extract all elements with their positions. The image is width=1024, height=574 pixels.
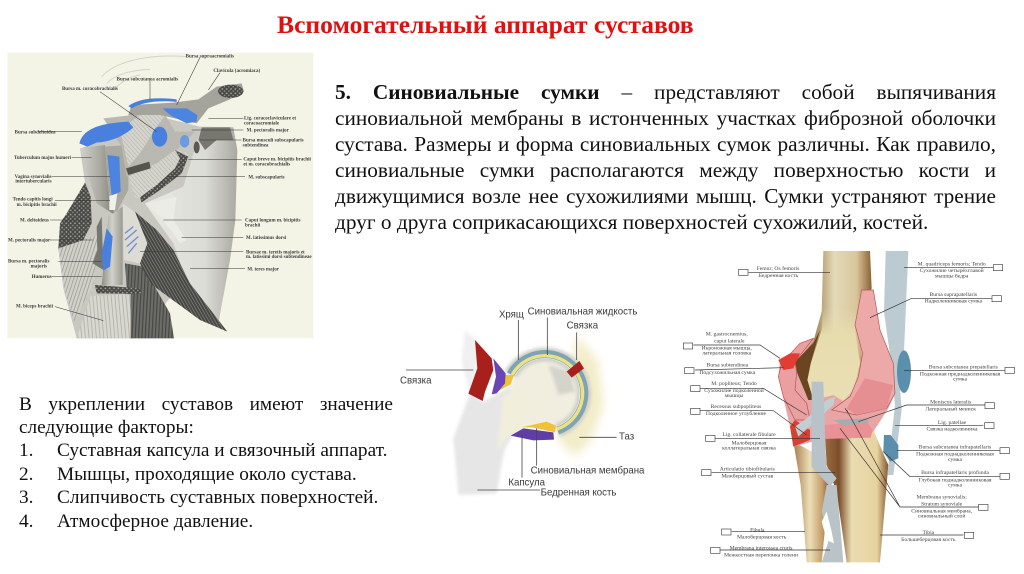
text block: synovial bursae description: синовиальной мембраны в истонченных участках фиброзной оболочки: [335, 106, 996, 130]
shoulder anatomical labels: coracoacromiale: [244, 122, 280, 127]
knee anatomical labels: Икроножная мышца,: [701, 345, 752, 351]
knee anatomical labels: Membrana synovialis;: [916, 494, 967, 500]
text block: joint strengthening factors: следующие факторы:: [19, 417, 194, 438]
hip labels: Связка: [400, 376, 432, 387]
hip labels: Связка: [567, 320, 599, 331]
shoulder anatomical labels: subtendinea: [243, 143, 269, 148]
text block: joint strengthening factors: Суставная капсула и связочный аппарат.: [57, 440, 387, 461]
blue fibres: [125, 227, 138, 253]
hip labels: Хрящ: [499, 309, 524, 320]
shoulder anatomical labels: m. latissimi dorsi subtendineae: [246, 255, 312, 260]
collateral ligament: [812, 382, 837, 487]
knee anatomical labels: сумка: [953, 376, 967, 382]
knee anatomical labels: Recessus subpopliteus: [711, 404, 761, 410]
panel: hip joint diagram: [400, 307, 645, 499]
knee anatomical labels: Tibia: [922, 530, 935, 536]
humerus cut: [95, 285, 142, 294]
knee anatomical labels: коллатеральная связка: [722, 445, 776, 451]
knee anatomical labels: Синовиальная мембрана,: [911, 507, 973, 514]
intertubercular sheath: [107, 155, 121, 196]
infrapatellar blue bursa: [883, 435, 898, 462]
leader lines: [693, 268, 1005, 550]
text block: joint strengthening factors: 4.: [19, 510, 33, 532]
deltoid cut: [58, 183, 92, 248]
knee anatomical labels: Bursa subcutanea prepatellaris: [929, 364, 998, 370]
left ligament red: [468, 340, 493, 401]
femur: [797, 251, 872, 402]
synovial inner line: [514, 358, 580, 427]
faint sketch lines at top: [102, 56, 187, 90]
humeral head: [80, 145, 115, 215]
femur bone: [453, 385, 523, 495]
tibia: [825, 430, 888, 562]
bursa inner dark: [847, 378, 893, 415]
bicipital groove band: [105, 145, 128, 215]
lower labrum yellow: [523, 422, 556, 432]
knee anatomical labels: Membrana interossea cruris: [730, 546, 792, 552]
knee anatomical labels: мышцы бедра: [935, 272, 969, 279]
knee anatomical labels: Сухожилие подколенной: [704, 387, 764, 394]
knee anatomical labels: Stratum synoviale: [921, 502, 963, 508]
lower dark muscles: [125, 263, 174, 338]
outer arc shadow: [511, 354, 584, 430]
shoulder anatomical labels: Caput breve m. bicipitis brachii: [243, 158, 312, 163]
shoulder anatomical labels: brachii: [245, 223, 261, 228]
shaft: [102, 207, 123, 285]
shoulder base silhouette: [58, 110, 235, 338]
shoulder anatomical labels: Clavicula (acromiaca): [213, 69, 261, 74]
shoulder anatomical labels: et m. coracobrachialis: [243, 163, 290, 168]
text block: synovial bursae description: [335, 80, 996, 234]
knee anatomical labels: Подколенное углубление: [706, 410, 767, 417]
knee anatomical labels: M. popliteus; Tendo: [711, 381, 757, 387]
oblique tendon: [795, 397, 835, 437]
gastrocnemius red: [778, 353, 800, 370]
shoulder anatomical labels: Bursae m. teretis majoris et: [246, 250, 305, 255]
text block: synovial bursae description: движущимися возле нее сухожилиями мышц. Сумки устраняют трение: [335, 184, 996, 208]
shoulder anatomical labels: Bursa subcutanea acromialis: [117, 78, 178, 83]
femoral head: [510, 358, 580, 428]
knee anatomical labels: Латеральный мениск: [925, 405, 976, 412]
suprapatellar bursa: [832, 290, 895, 415]
knee anatomical labels: Бедренная кость: [759, 273, 798, 279]
hip labels: Синовиальная жидкость: [528, 307, 637, 318]
knee anatomical labels: Большеберцовая кость: [901, 536, 956, 543]
shoulder anatomical labels: Bursa m. coracobrachialis: [62, 87, 118, 92]
light patch: [123, 203, 148, 263]
scapula: [145, 127, 237, 323]
clavicle cut: [218, 85, 243, 98]
fibula: [793, 442, 830, 562]
head inner shading: [548, 365, 575, 395]
knee anatomical labels: Meniscus lateralis: [930, 399, 971, 405]
interosseous membrane: [822, 485, 843, 562]
shoulder anatomical labels: intertubercularis: [15, 180, 52, 185]
knee anatomical labels: Подкожная поднадколенниковая: [916, 452, 994, 458]
right ligament red: [567, 361, 584, 378]
posterior pink synovial: [778, 338, 813, 420]
text block: synovial bursae description: синовиальные сумки располагаются между поверхностью кости и: [335, 158, 996, 182]
neck cream: [497, 392, 530, 452]
femoral condyle cream: [807, 308, 860, 400]
bursa subdeltoidea: [79, 122, 133, 147]
brown shade: [795, 330, 820, 400]
knee anatomical labels: caput laterale: [714, 338, 745, 344]
shoulder anatomical labels: Bursa musculi subscapularis: [243, 139, 304, 144]
text block: synovial bursae description: сустава. Размеры и форма синовиальных сумок различны. Как правило,: [335, 132, 996, 156]
text block: joint strengthening factors: Мышцы, проходящие около сустава.: [57, 464, 357, 485]
shoulder anatomical labels: Bursa supraacromialis: [186, 54, 234, 59]
shoulder anatomical labels: Vagina synovialis: [15, 175, 52, 180]
shoulder anatomical labels: [8, 54, 312, 310]
shoulder anatomical labels: Humerus: [32, 275, 52, 280]
knee anatomical labels: Межберцовый сустав: [721, 473, 774, 480]
capsule blue band: [511, 354, 584, 430]
subscapularis fan: [128, 150, 188, 202]
title: Вспомогательный аппарат суставов: [277, 10, 694, 39]
bursa pectoralis: [102, 228, 113, 271]
knee anatomical labels: Глубокая поднадколенниковая: [919, 476, 992, 483]
subscapularis cut: [140, 150, 188, 202]
hip labels: Капсула: [508, 478, 546, 489]
panel: knee joint anatomy illustration: [683, 251, 1014, 562]
shoulder anatomical labels: M. biceps brachii: [16, 305, 54, 310]
knee anatomical labels: Малоберцовая: [732, 439, 767, 446]
text block: joint strengthening factors: [19, 394, 393, 532]
knee anatomical labels: M. quadriceps femoris; Tendo: [918, 260, 986, 267]
tendon white tip: [109, 193, 117, 210]
coracoid cut: [126, 162, 151, 175]
text block: synovial bursae description: 5. Синовиальные сумки – представляют собой выпячивания: [335, 80, 996, 104]
shoulder anatomical labels: Bursa subdeltoidea: [15, 131, 56, 136]
text block: joint strengthening factors: Атмосферное давление.: [57, 510, 253, 532]
prepatellar blue bursa: [897, 350, 911, 393]
lower red: [790, 420, 810, 447]
shoulder anatomical labels: Tuberculum majus humeri: [14, 156, 72, 161]
synovial fluid yellow band: [512, 356, 583, 429]
knee anatomical labels: Надколенниковая сумка: [925, 299, 983, 305]
knee anatomical labels: Bursa suprapatellaris: [930, 292, 977, 298]
knee anatomical labels: сумка: [948, 457, 962, 463]
lower capsule purple: [511, 428, 554, 440]
number boxes: [683, 265, 1014, 553]
hip labels: Синовиальная мембрана: [531, 466, 645, 477]
shoulder anatomical labels: M. teres major: [247, 267, 280, 272]
bursa subscapularis: [180, 135, 189, 148]
knee anatomical labels: Bursa subtendinea: [707, 363, 749, 369]
shoulder anatomical labels: Bursa m. pectoralis: [8, 259, 49, 264]
upper joint mass: [103, 112, 195, 177]
knee anatomical labels: Подкожная преднадколенниковая: [920, 371, 1001, 377]
knee anatomical labels: Связка надколенника: [926, 427, 978, 433]
label leaders: [38, 57, 245, 321]
shoulder anatomical labels: m. bicipitis brachii: [17, 203, 57, 208]
pelvis cream glow: [557, 335, 603, 457]
bursa supraacromialis: [163, 108, 197, 123]
shoulder anatomical labels: M. latissimus dorsi: [246, 236, 287, 241]
biceps: [77, 294, 131, 338]
panel: shoulder joint anatomy illustration: [7, 53, 313, 338]
white window: [822, 512, 834, 543]
text block: joint strengthening factors: 2.: [19, 464, 33, 485]
knee anatomical labels: Lig. patellae: [938, 420, 967, 426]
teres major: [135, 212, 227, 332]
text block: joint strengthening factors: Слипчивость суставных поверхностей.: [57, 487, 378, 508]
knee base silhouette: [778, 325, 895, 447]
knee anatomical labels: Малоберцовая кость: [737, 534, 787, 541]
scapula fold: [147, 197, 187, 243]
shoulder anatomical labels: M. pectoralis major: [8, 239, 51, 244]
text block: joint strengthening factors: В укреплении суставов имеют значение: [19, 394, 393, 414]
knee anatomical labels: мышцы: [725, 393, 743, 399]
shoulder anatomical labels: Tendo capitis longi: [13, 198, 53, 203]
knee anatomical labels: [699, 260, 1001, 559]
knee anatomical labels: синовиальный слой: [918, 512, 965, 519]
text block: synovial bursae description: друг о друга соприкасающихся поверхностей сухожилий, костей.: [335, 210, 928, 234]
knee anatomical labels: Bursa infrapatellaris profunda: [921, 469, 989, 476]
shoulder anatomical labels: majoris: [31, 264, 47, 269]
knee anatomical labels: Подсухожильная сумка: [699, 370, 756, 376]
quadriceps tendon: [884, 251, 908, 475]
knee anatomical labels: Bursa subcutanea infrapatellaris: [919, 443, 991, 450]
deltoid fibres: [58, 235, 97, 322]
shoulder anatomical labels: M. pectoralis major: [247, 129, 290, 134]
clavicle: [128, 83, 244, 123]
shoulder anatomical labels: M. deltoideus: [20, 219, 49, 224]
upper labrum yellow: [497, 375, 514, 392]
hip labels: Бедренная кость: [541, 488, 616, 499]
shoulder anatomical labels: Caput longum m. bicipitis: [245, 219, 300, 224]
fold shadow: [93, 217, 103, 270]
menisc gray: [833, 418, 869, 426]
knee anatomical labels: Межкостная перепонка голени: [724, 553, 798, 559]
upper bone fade: [462, 330, 490, 393]
pink meniscus: [823, 422, 873, 439]
small dark recess: [194, 141, 200, 153]
text block: joint strengthening factors: 1.: [19, 440, 33, 461]
shoulder anatomical labels: M. subscapularis: [248, 175, 285, 180]
knee anatomical labels: Fibula: [750, 527, 765, 533]
bursa subacromialis: [128, 98, 177, 108]
knee anatomical labels: Articulatio tibiofibularis: [720, 465, 775, 472]
knee anatomical labels: Femur; Os femoris: [757, 265, 799, 272]
fibres under acromion: [120, 113, 167, 167]
upper capsule purple: [492, 358, 506, 394]
knee anatomical labels: M. gastrocnemius,: [706, 332, 748, 338]
text block: joint strengthening factors: 3.: [19, 487, 33, 508]
hip labels: [400, 307, 645, 499]
knee anatomical labels: Сухожилие четырёхглавой: [920, 267, 984, 274]
knee anatomical labels: сумка: [948, 482, 962, 488]
shoulder anatomical labels: Lig. coracoclaviculare et: [244, 117, 296, 122]
hip labels: Таз: [619, 432, 635, 443]
knee anatomical labels: латеральная головка: [702, 350, 752, 356]
scapula top shadow: [198, 127, 233, 150]
knee anatomical labels: Lig. collaterale fibulare: [722, 431, 776, 438]
bursa coracobrachialis: [152, 127, 167, 147]
